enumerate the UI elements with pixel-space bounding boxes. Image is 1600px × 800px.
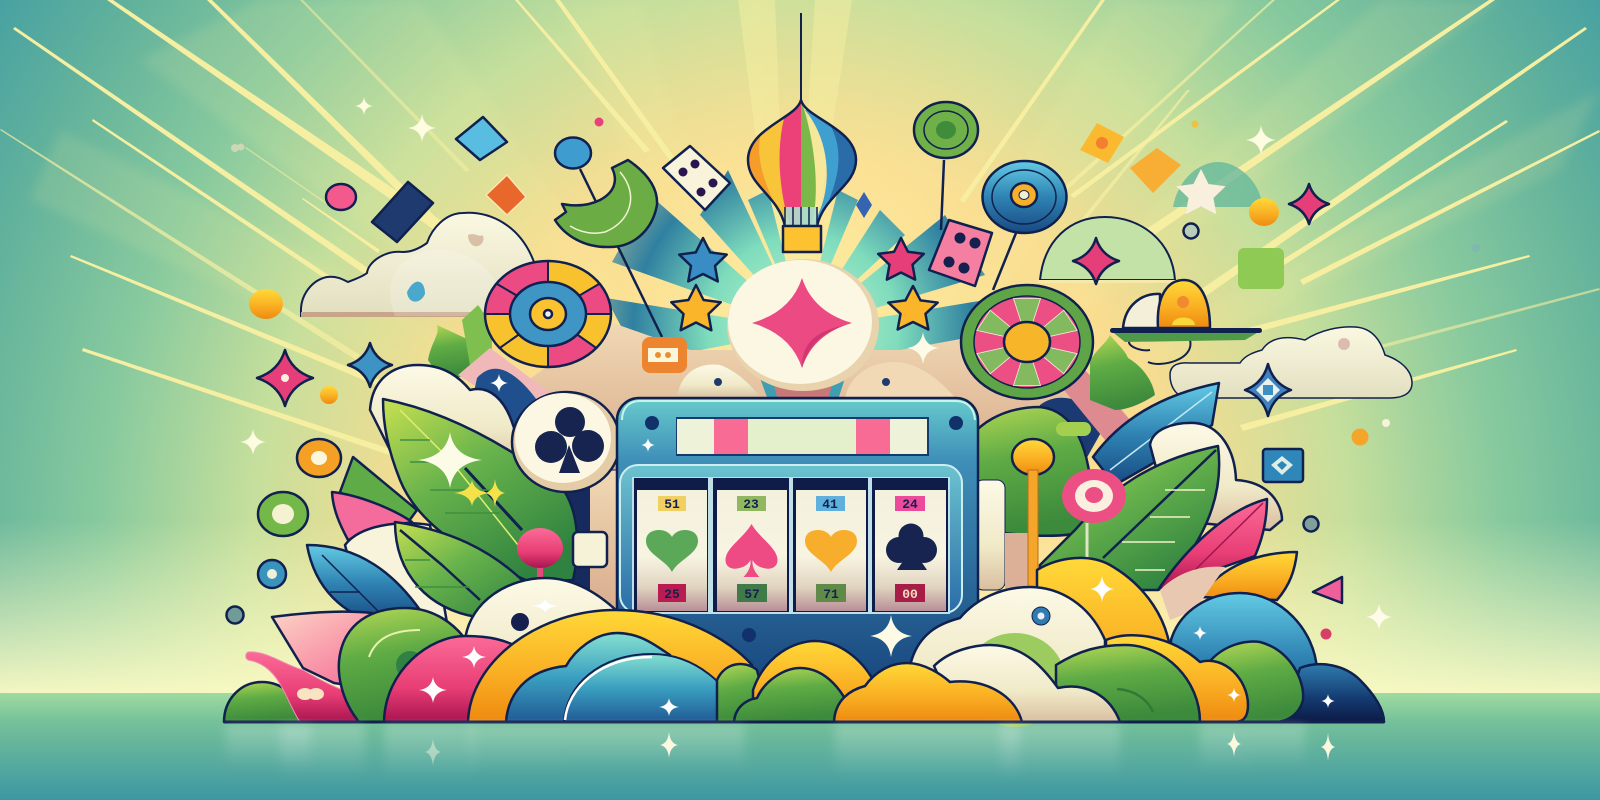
mound: cream left — [465, 578, 618, 722]
icon: yellow ball — [249, 289, 283, 319]
floating centre items — [485, 13, 1066, 373]
cloud right — [1170, 327, 1412, 398]
icon: sparkle — [907, 332, 939, 364]
light rays — [0, 0, 1600, 540]
cloud left — [301, 213, 534, 317]
mound: green right — [1211, 642, 1303, 722]
icon: blue lollipop — [982, 161, 1066, 290]
icon: blue square — [1263, 449, 1303, 482]
leaf: pink — [332, 492, 412, 540]
mound: cream front — [934, 645, 1120, 722]
mound: yellow cloud — [834, 663, 1022, 722]
central cream bumps — [677, 362, 955, 398]
cloud behind big leaf — [370, 365, 530, 470]
slot machine — [617, 398, 978, 710]
icon: small blue diamond — [856, 192, 872, 218]
foreground mounds — [0, 558, 1600, 800]
leaf: pink curl — [246, 652, 360, 722]
leaf: blue right — [1093, 383, 1219, 485]
icon: yellow star left — [671, 285, 721, 330]
icon: dark dot — [226, 606, 244, 624]
back leaves left — [307, 457, 450, 640]
icon: yellow square — [1080, 123, 1124, 163]
reel 3 — [793, 478, 868, 612]
icon: target wheel — [485, 261, 611, 367]
icon: pink knob — [517, 528, 563, 584]
mound: cream big — [911, 587, 1105, 722]
icon: small yellow dot — [1192, 120, 1198, 128]
club button — [512, 392, 620, 492]
mound: green patch — [965, 633, 1065, 727]
icon: dark ring right — [1304, 516, 1318, 532]
cream bump — [345, 523, 450, 640]
machine back green right — [960, 407, 1092, 593]
icon: blue rhombus — [456, 117, 507, 160]
mound: orange right — [1106, 635, 1248, 722]
small leaf left — [395, 522, 530, 640]
leaf: green back — [340, 457, 417, 540]
mound: teal back — [506, 633, 700, 722]
mound: yellow big right — [1037, 558, 1171, 722]
big leaf — [383, 399, 577, 582]
cream strip right — [1160, 567, 1225, 620]
icon: blue ring — [258, 560, 286, 588]
machine side parts — [520, 440, 620, 620]
tan cabinet arch — [458, 322, 1130, 470]
icon: hat plate — [1110, 280, 1262, 364]
leaves right — [1040, 335, 1297, 620]
icon: dark ring — [1184, 224, 1198, 238]
icon: pink diamond right — [1289, 184, 1329, 224]
display window — [676, 417, 929, 456]
floating shapes left — [226, 97, 604, 624]
icon: lollipop stick left — [580, 169, 662, 337]
icon: orange ring — [297, 439, 341, 477]
icon: green crescent — [555, 160, 657, 247]
leaf: yellow right — [1200, 552, 1297, 600]
cabinet button and knob — [512, 392, 620, 584]
icon: pink triangle — [1313, 577, 1342, 603]
icon: pink die — [929, 220, 992, 286]
icon: blue star — [679, 238, 727, 281]
icon: sparkle lower right — [1366, 604, 1392, 630]
icon: green ring — [258, 492, 308, 536]
icon: pink diamond — [257, 350, 313, 406]
mound: small green centre — [717, 664, 770, 722]
reel 4: 24 — [902, 497, 918, 512]
water reflections — [226, 724, 1305, 779]
reflected sparkles — [425, 731, 1335, 766]
bolts — [645, 416, 963, 642]
icon: green square — [1238, 248, 1284, 289]
icon: orange diamond — [1130, 148, 1181, 193]
reel 1: 51 — [664, 497, 680, 512]
machine frame — [617, 398, 978, 710]
leaf: blue — [307, 545, 420, 622]
mound: yellow back centre — [753, 641, 873, 722]
icon: yellow ball right — [1249, 198, 1279, 226]
small leaves behind wheel left — [428, 305, 492, 378]
floating shapes right — [1038, 120, 1480, 640]
central jewel neck — [760, 378, 845, 400]
icon: sparkles upper left — [240, 97, 436, 455]
reel 1: 25 — [664, 587, 680, 602]
mound: pink — [384, 636, 520, 722]
reel 3: 71 — [823, 587, 839, 602]
reel 4 — [872, 478, 948, 612]
icon: small pink dot — [594, 118, 604, 126]
icon: small dots right — [1352, 419, 1390, 446]
icon: yellow star right — [888, 286, 938, 329]
mound: navy right — [1282, 664, 1384, 722]
square button — [573, 532, 607, 567]
icon: balloon — [745, 13, 860, 252]
central burst wedges — [606, 170, 985, 385]
cream bumps right — [1150, 423, 1282, 530]
target knob — [1062, 469, 1126, 560]
leaf: light pink — [272, 612, 380, 690]
icon: large sparkle — [870, 615, 912, 657]
mound: green front centre — [734, 668, 855, 722]
icon: leaf sparkles — [418, 432, 505, 507]
reel 2 — [713, 478, 789, 612]
reel 4: 00 — [902, 587, 918, 602]
leaf: green right — [1040, 446, 1219, 590]
lever — [1012, 439, 1054, 588]
icon: sparkle right — [1246, 125, 1276, 155]
icon: white die — [663, 146, 730, 210]
icon: dome with diamond — [1038, 217, 1178, 284]
baseline — [224, 720, 1384, 724]
mound: blue right — [1171, 593, 1317, 722]
reel frame — [620, 465, 962, 613]
icon: blue diamond — [348, 343, 392, 387]
mound: yellow arch — [468, 610, 752, 722]
leaf: small green behind — [1090, 335, 1155, 410]
icon: pink star — [878, 238, 924, 280]
icon: grey dots — [231, 144, 244, 152]
icon: red dot — [1320, 628, 1332, 640]
reel 2: 57 — [744, 587, 760, 602]
icon: green lollipop — [914, 102, 978, 230]
icon: small blue dot — [1472, 244, 1480, 252]
lever ball and target — [1012, 439, 1126, 588]
lever shaft front — [1028, 470, 1038, 590]
icon: teal dome with star — [1173, 162, 1262, 214]
icon: navy card — [372, 182, 433, 242]
icon: blue ball left — [555, 138, 591, 168]
central diamond medallion — [727, 259, 939, 391]
icon: orange diamond — [486, 175, 526, 215]
floor and water — [0, 693, 1600, 800]
reel 3: 41 — [822, 497, 838, 512]
reel 2: 23 — [743, 497, 759, 512]
icon: pink ball — [326, 184, 356, 210]
icon: orange tag — [642, 337, 687, 373]
icon: small yellow ball — [320, 386, 338, 404]
mound: green circle — [339, 608, 466, 722]
mound: green big — [1056, 645, 1200, 722]
mound: small green left — [224, 682, 310, 722]
leaf: pink right — [1158, 499, 1267, 590]
icon: blue diamond right — [1245, 364, 1291, 416]
reel 1 — [634, 478, 708, 612]
roulette wheel — [961, 285, 1093, 399]
mound: teal front — [564, 654, 745, 722]
